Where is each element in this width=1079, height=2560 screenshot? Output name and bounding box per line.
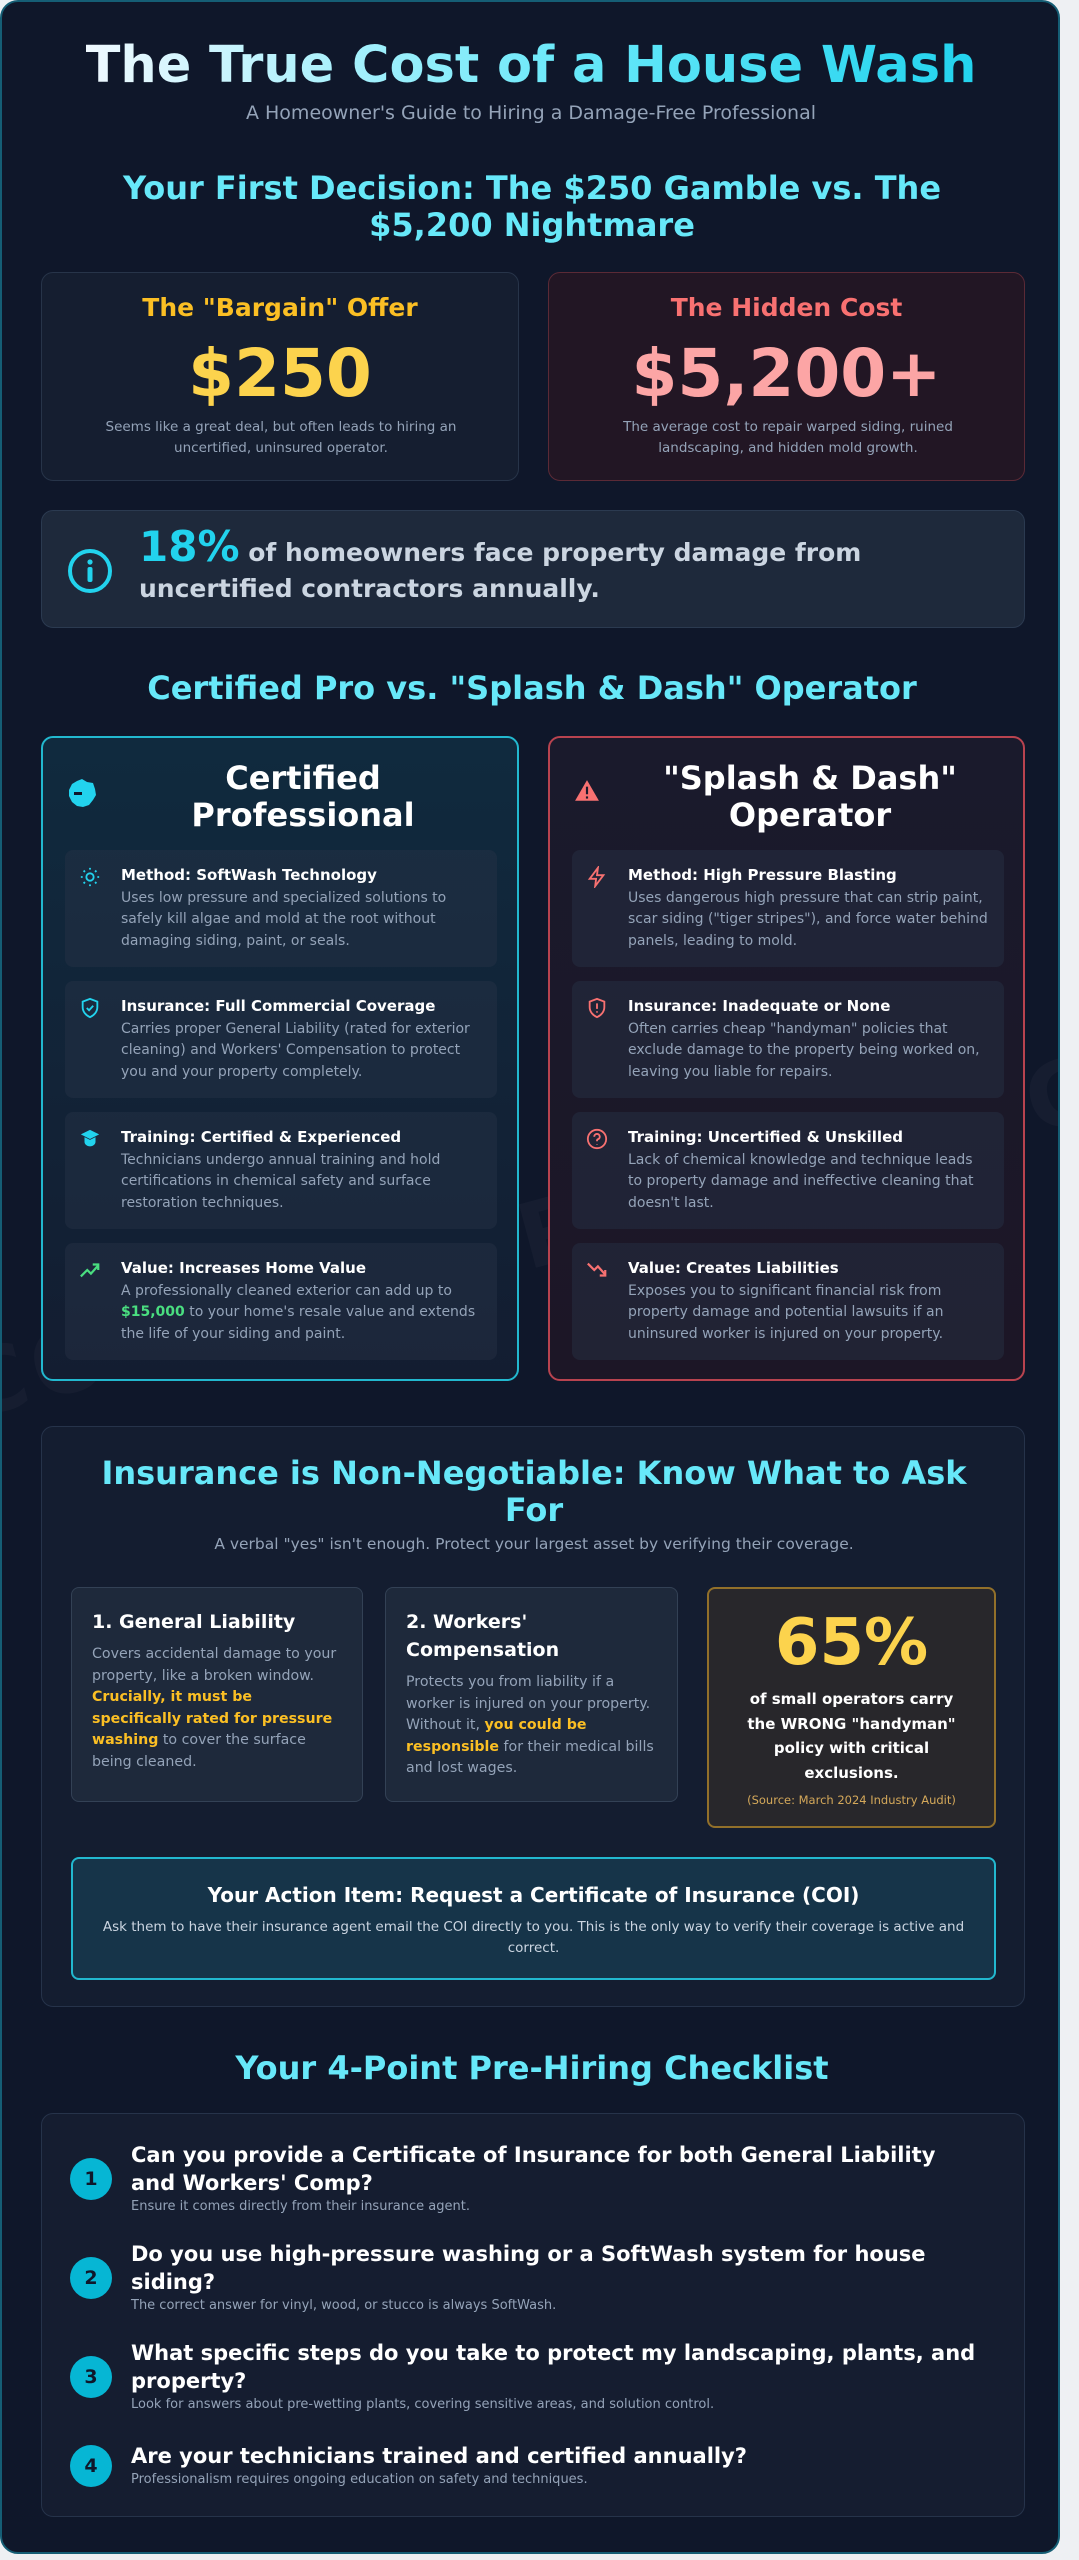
- item 4: Professionalism requires ongoing education on safety and techniques.: [131, 2472, 588, 2487]
- panel: bargain offer: [41, 272, 519, 481]
- stat: 65%: 65%: [775, 1606, 928, 1680]
- item: insurance: Insurance: Full Commercial Coverage: [121, 997, 435, 1015]
- item: training: Lack of chemical knowledge and technique leads to property damage and ineffective cleaning that doesn't last.: [628, 1152, 974, 1211]
- box: workers comp: Protects you from liability if a worker is injured on your property. Without it, you could be responsible for their medical bills and lost wages.: [406, 1674, 654, 1776]
- item 2: The correct answer for vinyl, wood, or stucco is always SoftWash.: [131, 2298, 556, 2313]
- item: training: Training: Certified & Experienced: [121, 1128, 401, 1146]
- callout: action item: [71, 1857, 996, 1980]
- heading: Insurance is Non-Negotiable: Know What to Ask For: [101, 1454, 967, 1529]
- card title: The Hidden Cost: [671, 293, 902, 322]
- item 3: What specific steps do you take to protect my landscaping, plants, and property?: [131, 2341, 975, 2393]
- item 3: 3: [84, 2366, 98, 2388]
- item: value: [572, 1243, 1004, 1360]
- panel: checklist: [41, 2113, 1025, 2517]
- item: method: [572, 850, 1004, 967]
- item 2: [70, 2242, 926, 2313]
- item 1: Ensure it comes directly from their insurance agent.: [131, 2199, 470, 2214]
- description: Seems like a great deal, but often leads to hiring an uncertified, uninsured operator.: [106, 419, 456, 456]
- icon: info: [68, 549, 112, 593]
- item: value: Value: Creates Liabilities: [628, 1259, 839, 1277]
- item: insurance: Insurance: Inadequate or None: [628, 997, 890, 1015]
- item: value: Value: Increases Home Value: [121, 1259, 366, 1277]
- item: insurance: Often carries cheap "handyman" policies that exclude damage to the property being worked on, leaving you liable for repairs.: [628, 1021, 980, 1080]
- item: method: Method: High Pressure Blasting: [628, 866, 897, 884]
- item 4: 4: [84, 2454, 98, 2476]
- stat text: 18% of homeowners face property damage from uncertified contractors annually.: [139, 522, 861, 603]
- item: method: Method: SoftWash Technology: [121, 866, 377, 884]
- title: Certified Professional: [191, 759, 415, 834]
- big number: $250: [188, 335, 372, 412]
- item 4: Are your technicians trained and certified annually?: [131, 2444, 747, 2468]
- item 3: Look for answers about pre-wetting plants, covering sensitive areas, and solution control.: [131, 2397, 714, 2412]
- title: The True Cost of a House Wash: [86, 36, 976, 95]
- item: method: [65, 850, 497, 967]
- subtitle: A Homeowner's Guide to Hiring a Damage-Free Professional: [246, 102, 816, 124]
- box: general liability: 1. General Liability: [92, 1611, 295, 1633]
- panel: insurance: [41, 1426, 1025, 2007]
- card title: The "Bargain" Offer: [142, 293, 418, 322]
- big number: $5,200+: [632, 335, 942, 412]
- item: insurance: [65, 981, 497, 1098]
- description: The average cost to repair warped siding, ruined landscaping, and hidden mold growth.: [623, 419, 953, 456]
- item: value: [65, 1243, 497, 1360]
- item 2: Do you use high-pressure washing or a SoftWash system for house siding?: [131, 2242, 926, 2294]
- box: workers comp: 2. Workers' Compensation: [406, 1611, 559, 1661]
- item 1: 1: [84, 2168, 98, 2190]
- title: "Splash & Dash" Operator: [663, 759, 957, 834]
- item: training: [572, 1112, 1004, 1229]
- item: training: [65, 1112, 497, 1229]
- heading: comparison: Certified Pro vs. "Splash & Dash" Operator: [147, 669, 917, 707]
- item: method: Uses dangerous high pressure that can strip paint, scar siding ("tiger stripes"), and force water behind panels, leading to mold.: [628, 890, 988, 949]
- box: general liability: Covers accidental damage to your property, like a broken window. Crucially, it must be specifically rated for pressure washing to cover the surface being cleaned.: [92, 1646, 336, 1770]
- panel: hidden cost: [548, 272, 1025, 481]
- stat: 65%: [707, 1587, 996, 1828]
- item 2: 2: [84, 2266, 98, 2288]
- panel: splash and dash: [548, 736, 1025, 1381]
- item 3: [70, 2341, 975, 2412]
- stat callout: 18%: [41, 510, 1025, 628]
- icon: warning: [575, 780, 599, 801]
- item: training: Technicians undergo annual training and hold certifications in chemical safety and surface restoration techniques.: [121, 1152, 440, 1211]
- stat: 65%: (Source: March 2024 Industry Audit): [747, 1793, 956, 1807]
- item 1: Can you provide a Certificate of Insurance for both General Liability and Workers' Comp?: [131, 2143, 935, 2195]
- item: insurance: [572, 981, 1004, 1098]
- item: value: Exposes you to significant financial risk from property damage and potential lawsuits if an uninsured worker is injured on your property.: [628, 1283, 943, 1342]
- heading: first decision: Your First Decision: The $250 Gamble vs. The $5,200 Nightmare: [123, 169, 941, 244]
- item: insurance: Carries proper General Liability (rated for exterior cleaning) and Workers' Compensation to protect you and your property completely.: [121, 1021, 470, 1080]
- callout: action item: Your Action Item: Request a Certificate of Insurance (COI): [208, 1883, 859, 1907]
- item 1: [70, 2143, 935, 2214]
- icon: badge: [69, 779, 96, 807]
- subtitle: A verbal "yes" isn't enough. Protect your largest asset by verifying their coverage.: [214, 1535, 854, 1553]
- item: value: A professionally cleaned exterior can add up to $15,000 to your home's resale value and extends the life of your siding and paint.: [121, 1283, 475, 1342]
- heading: checklist: Your 4-Point Pre-Hiring Checklist: [235, 2049, 829, 2087]
- box: general liability: [71, 1587, 363, 1802]
- panel: certified professional: [41, 736, 519, 1381]
- item 4: [70, 2444, 747, 2487]
- stat: 65%: of small operators carry the WRONG "handyman" policy with critical exclusions.: [747, 1690, 956, 1782]
- callout: action item: Ask them to have their insurance agent email the COI directly to you. This is the only way to verify their coverage is active and correct.: [103, 1919, 964, 1956]
- box: workers comp: [385, 1587, 678, 1802]
- item: training: Training: Uncertified & Unskilled: [628, 1128, 903, 1146]
- item: method: Uses low pressure and specialized solutions to safely kill algae and mold at the root without damaging siding, paint, or seals.: [121, 890, 446, 949]
